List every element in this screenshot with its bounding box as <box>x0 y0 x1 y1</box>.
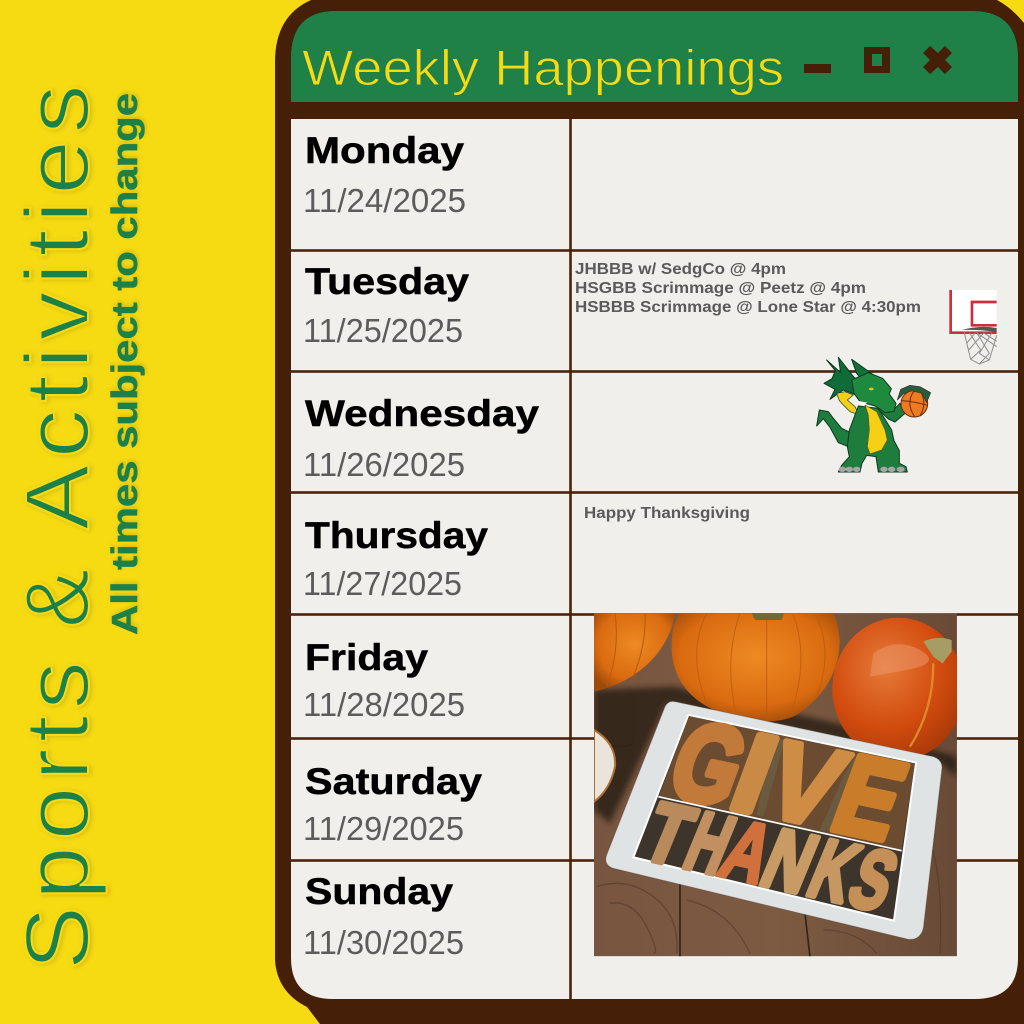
arm <box>878 403 905 422</box>
heading: Weekly Happenings: Weekly Happenings <box>302 40 784 96</box>
vertical title: Sports & Activities: Sports <box>8 655 108 970</box>
wood type: THANKS: K <box>797 822 872 920</box>
wood type: THANKS: T <box>631 785 707 883</box>
row: Sunday: 11/30/2025 <box>303 924 464 961</box>
toes <box>839 467 905 472</box>
tail <box>817 410 855 448</box>
eye <box>869 388 874 390</box>
shadows under pumpkins <box>594 687 957 823</box>
row: Wednesday: 11/26/2025 <box>303 446 465 483</box>
vertical subtitle: times subject to change: All times subject to change <box>104 93 145 635</box>
Tuesday events: HSGBB Scrimmage @ Peetz @ 4pm <box>575 280 866 297</box>
row: Thursday <box>303 515 488 602</box>
wood gaps <box>757 737 785 817</box>
basketball <box>901 390 928 417</box>
wood type: THANKS <box>650 800 898 912</box>
tablet <box>606 701 942 939</box>
wood type: GIVE: I <box>717 712 791 836</box>
wood type: GIVE: G <box>655 699 762 830</box>
row: Wednesday: Wednesday <box>305 393 539 434</box>
pumpkin left <box>594 613 675 692</box>
window control icons <box>804 46 952 74</box>
row: Saturday: Saturday <box>305 761 482 802</box>
row: Thursday: 11/27/2025 <box>303 565 462 602</box>
vertical title: Sports & Activities <box>8 78 108 970</box>
row: Saturday <box>303 761 482 847</box>
row: Sunday: Sunday <box>305 871 453 912</box>
row: Monday: 11/24/2025 <box>303 182 466 219</box>
row: Sunday <box>303 871 464 961</box>
row: Tuesday <box>303 261 469 349</box>
row: Tuesday: Tuesday <box>305 261 469 302</box>
icon: dragon mascot holding a basketball <box>817 357 931 472</box>
teeth <box>857 401 867 406</box>
table planks <box>680 883 810 957</box>
Tuesday events: HSBBB Scrimmage @ Lone Star @ 4:30pm <box>575 299 921 316</box>
body and legs <box>838 406 907 472</box>
row: Wednesday <box>303 393 539 483</box>
vertical title: Sports & Activities: & <box>8 563 108 628</box>
upper screen wood tone <box>659 716 915 850</box>
vertical title: Sports & Activities: Activities <box>8 78 108 530</box>
horn <box>852 359 875 382</box>
row: Monday <box>303 130 466 219</box>
head <box>852 373 896 413</box>
icon: basketball hoop <box>949 290 997 364</box>
claws <box>897 385 931 403</box>
wood type: THANKS: A <box>708 802 787 901</box>
pumpkin middle <box>672 613 840 721</box>
row: Friday: 11/28/2025 <box>303 686 465 723</box>
row: Tuesday: 11/25/2025 <box>303 312 463 349</box>
belly <box>865 405 887 454</box>
window frame <box>275 0 1024 1024</box>
icon: close <box>923 46 952 74</box>
wing <box>824 357 862 399</box>
icon: minimize <box>804 64 831 73</box>
icon: maximize <box>864 47 890 73</box>
row: Monday: Monday <box>305 130 464 171</box>
schedule table <box>291 119 1018 999</box>
tablet screen <box>633 715 916 921</box>
pumpkin stem <box>752 613 784 620</box>
coffee cup <box>594 730 615 802</box>
wing membrane <box>837 392 859 415</box>
wood type: GIVE: V <box>750 719 861 851</box>
row: Friday: Friday <box>305 637 428 678</box>
wood type: GIVE: E <box>819 733 920 863</box>
Tuesday events: JHBBB w/ SedgCo @ 4pm <box>575 261 786 278</box>
Tuesday events <box>575 261 921 316</box>
wood type: THANKS: S <box>837 831 910 928</box>
row: Saturday: 11/29/2025 <box>303 810 464 847</box>
screen divider <box>658 797 902 851</box>
Thursday event: Happy Thanksgiving: Happy Thanksgiving <box>584 505 750 522</box>
wood type: GIVE <box>673 722 910 844</box>
window title bar <box>291 11 1018 102</box>
pumpkin right <box>832 618 964 760</box>
wood type: THANKS: N <box>750 812 830 911</box>
row: Thursday: Thursday <box>305 515 488 556</box>
wood type: THANKS: H <box>673 795 747 892</box>
photo: Give Thanks tablet with pumpkins <box>594 613 964 957</box>
row: Friday <box>303 637 465 723</box>
